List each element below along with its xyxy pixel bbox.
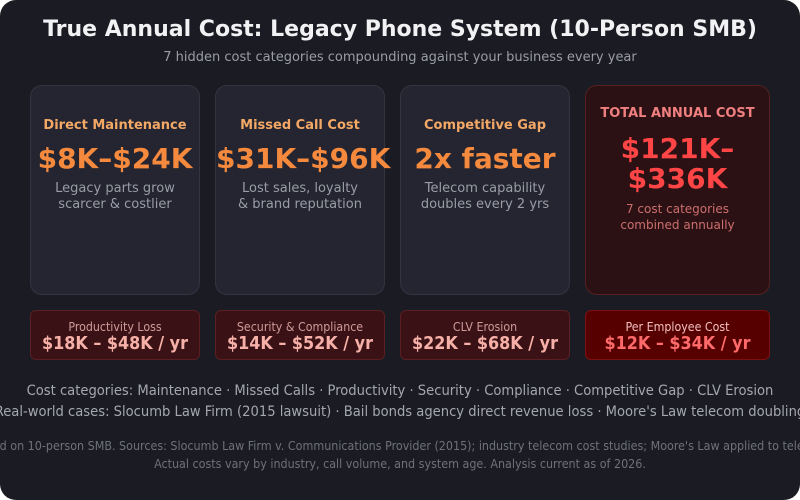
panel: missed call cost: Missed Call Cost: [240, 118, 360, 133]
panel: direct maintenance: [30, 85, 200, 295]
card: CLV erosion: $22K – $68K / yr: [412, 333, 558, 354]
panel: competitive gap: [400, 85, 570, 295]
panel: total annual cost: $121K–: [621, 132, 734, 165]
panel: missed call cost: [215, 85, 385, 295]
card: productivity loss: Productivity Loss: [68, 320, 162, 334]
card: per employee cost: Per Employee Cost: [625, 320, 730, 334]
panel: missed call cost: $31K–$96K: [216, 142, 390, 175]
panel: direct maintenance: $8K–$24K: [38, 142, 192, 175]
footnote: Actual costs vary by industry, call volume, and system age. Analysis current as of 2026.: [154, 456, 646, 471]
text: real-world cases: Real-world cases: Slocumb Law Firm (2015 lawsuit) · Bail bonds agency direct revenue loss · Moore's Law telecom doubling: [0, 403, 800, 420]
panel: direct maintenance: Direct Maintenance: [43, 118, 187, 133]
card: per employee cost: $12K – $34K / yr: [604, 333, 750, 354]
card: security & compliance: Security & Compliance: [237, 320, 363, 334]
text: cost categories: Cost categories: Maintenance · Missed Calls · Productivity · Security · Compliance · Competitive Gap · CLV Erosion: [27, 382, 773, 399]
panel: total annual cost: $336K: [628, 162, 727, 195]
panel: missed call cost: & brand reputation: [238, 197, 362, 212]
panel: competitive gap: 2x faster: [414, 142, 556, 175]
card: productivity loss: $18K – $48K / yr: [42, 333, 188, 354]
panel: competitive gap: Competitive Gap: [424, 118, 546, 133]
card: CLV erosion: [400, 310, 570, 360]
footnote: [0, 438, 800, 471]
panel: missed call cost: Lost sales, loyalty: [242, 181, 358, 196]
panel: direct maintenance: scarcer & costlier: [58, 197, 172, 212]
panel: direct maintenance: Legacy parts grow: [55, 181, 175, 196]
card: security & compliance: $14K – $52K / yr: [227, 333, 373, 354]
title: True Annual Cost: Legacy Phone System (10-Person SMB): [43, 17, 757, 42]
panel: total annual cost: TOTAL ANNUAL COST: [600, 106, 755, 121]
subtitle: 7 hidden cost categories compounding against your business every year: [163, 50, 637, 65]
panel: competitive gap: Telecom capability: [425, 181, 545, 196]
card: security & compliance: [215, 310, 385, 360]
panel: competitive gap: doubles every 2 yrs: [421, 197, 549, 212]
panel: total annual cost: 7 cost categories: [626, 202, 729, 216]
card: per employee cost: [585, 310, 770, 360]
card: CLV erosion: CLV Erosion: [453, 320, 517, 334]
panel: total annual cost: combined annually: [620, 218, 735, 232]
panel: total annual cost: [585, 85, 770, 295]
card: productivity loss: [30, 310, 200, 360]
